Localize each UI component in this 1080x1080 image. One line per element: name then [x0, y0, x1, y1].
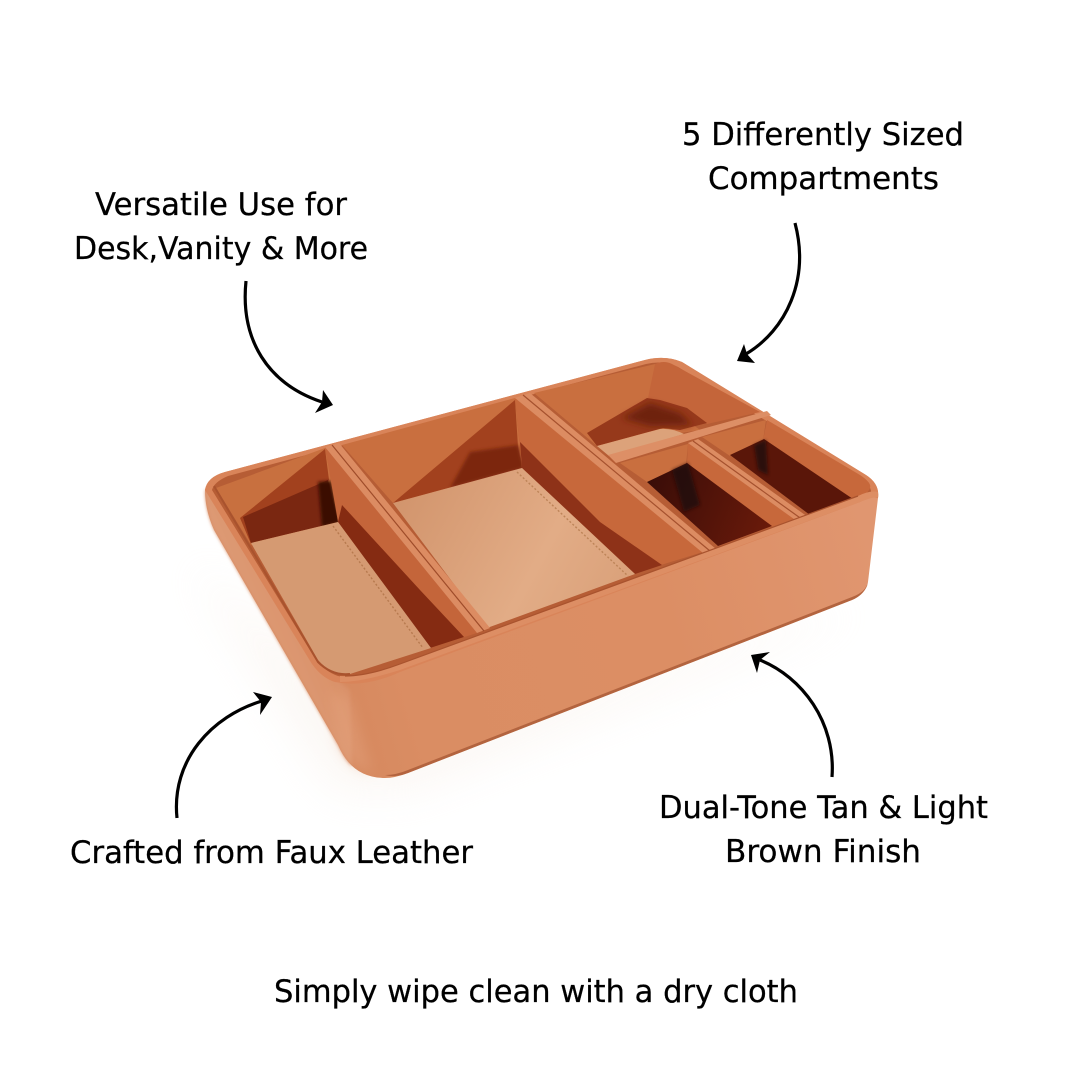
- back wall mid shade: [240, 449, 329, 544]
- product: leather tray organizer: [205, 358, 878, 778]
- dark well: [647, 463, 772, 546]
- cross divider: [608, 411, 771, 463]
- small divider band: [688, 439, 808, 522]
- right wall: [763, 420, 870, 499]
- right divider wall: [515, 398, 703, 573]
- tray left side face: [205, 490, 352, 766]
- back wall: [620, 444, 688, 482]
- deep shadow: [754, 440, 768, 475]
- deep shadow: [672, 463, 700, 512]
- right divider wall shadow: [520, 442, 662, 574]
- back wall: [534, 364, 700, 446]
- floor: [393, 468, 635, 628]
- back wall light: [216, 448, 340, 545]
- dark recess core: [622, 403, 692, 426]
- tray outer body: [205, 358, 878, 778]
- tray corner highlight: [330, 690, 372, 772]
- left divider band: [325, 443, 490, 633]
- callout text: Compartments: [708, 161, 939, 197]
- compartment: right small: [702, 420, 870, 515]
- dark well: [730, 439, 853, 515]
- soft shadow beneath tray: [190, 560, 860, 790]
- divider face: [325, 447, 477, 648]
- callout text: Brown Finish: [725, 834, 921, 870]
- arrow: versatile use: [245, 281, 333, 413]
- callout text: Dual-Tone Tan & Light: [659, 790, 988, 826]
- front rim edge line: [345, 496, 858, 676]
- left lip: [214, 486, 350, 674]
- rim shadow line: [212, 363, 871, 678]
- floor stitching: [333, 526, 423, 648]
- compartment: back right: [534, 362, 760, 456]
- front rim: [340, 492, 878, 682]
- floor: [597, 429, 684, 456]
- tray base edge: [385, 582, 868, 776]
- back wall shade: [393, 400, 522, 503]
- callout: compartments: [682, 117, 974, 197]
- callout text: Versatile Use for: [95, 187, 347, 223]
- back wall: [342, 398, 522, 503]
- compartment dividers: [325, 393, 808, 633]
- callout text: Desk,Vanity & More: [74, 231, 368, 267]
- callout text: 5 Differently Sized: [682, 117, 964, 153]
- arrow: compartments: [737, 223, 800, 363]
- side wall: [648, 362, 760, 424]
- compartment: large center: [342, 398, 703, 628]
- callout: dual tone: [659, 790, 998, 870]
- back wall corner dark: [450, 445, 524, 488]
- right wall: [687, 443, 798, 527]
- back wall: [702, 420, 766, 456]
- compartment: left tall: [214, 447, 477, 674]
- top rim surface: [205, 358, 878, 684]
- floor stitching: [517, 472, 628, 576]
- center back divider band: [515, 393, 716, 553]
- care note: Simply wipe clean with a dry cloth: [274, 974, 798, 1010]
- arrow: faux leather: [176, 692, 272, 818]
- deep corner: [318, 481, 340, 527]
- compartment: middle small: [620, 443, 798, 546]
- callout: faux leather: Crafted from Faux Leather: [70, 835, 473, 871]
- back wall dark: [243, 480, 338, 543]
- callout: versatile use: [74, 187, 368, 267]
- dark recess: [587, 398, 707, 446]
- floor: [251, 522, 431, 674]
- arrow: dual tone: [751, 652, 832, 777]
- divider face shadow: [338, 505, 464, 648]
